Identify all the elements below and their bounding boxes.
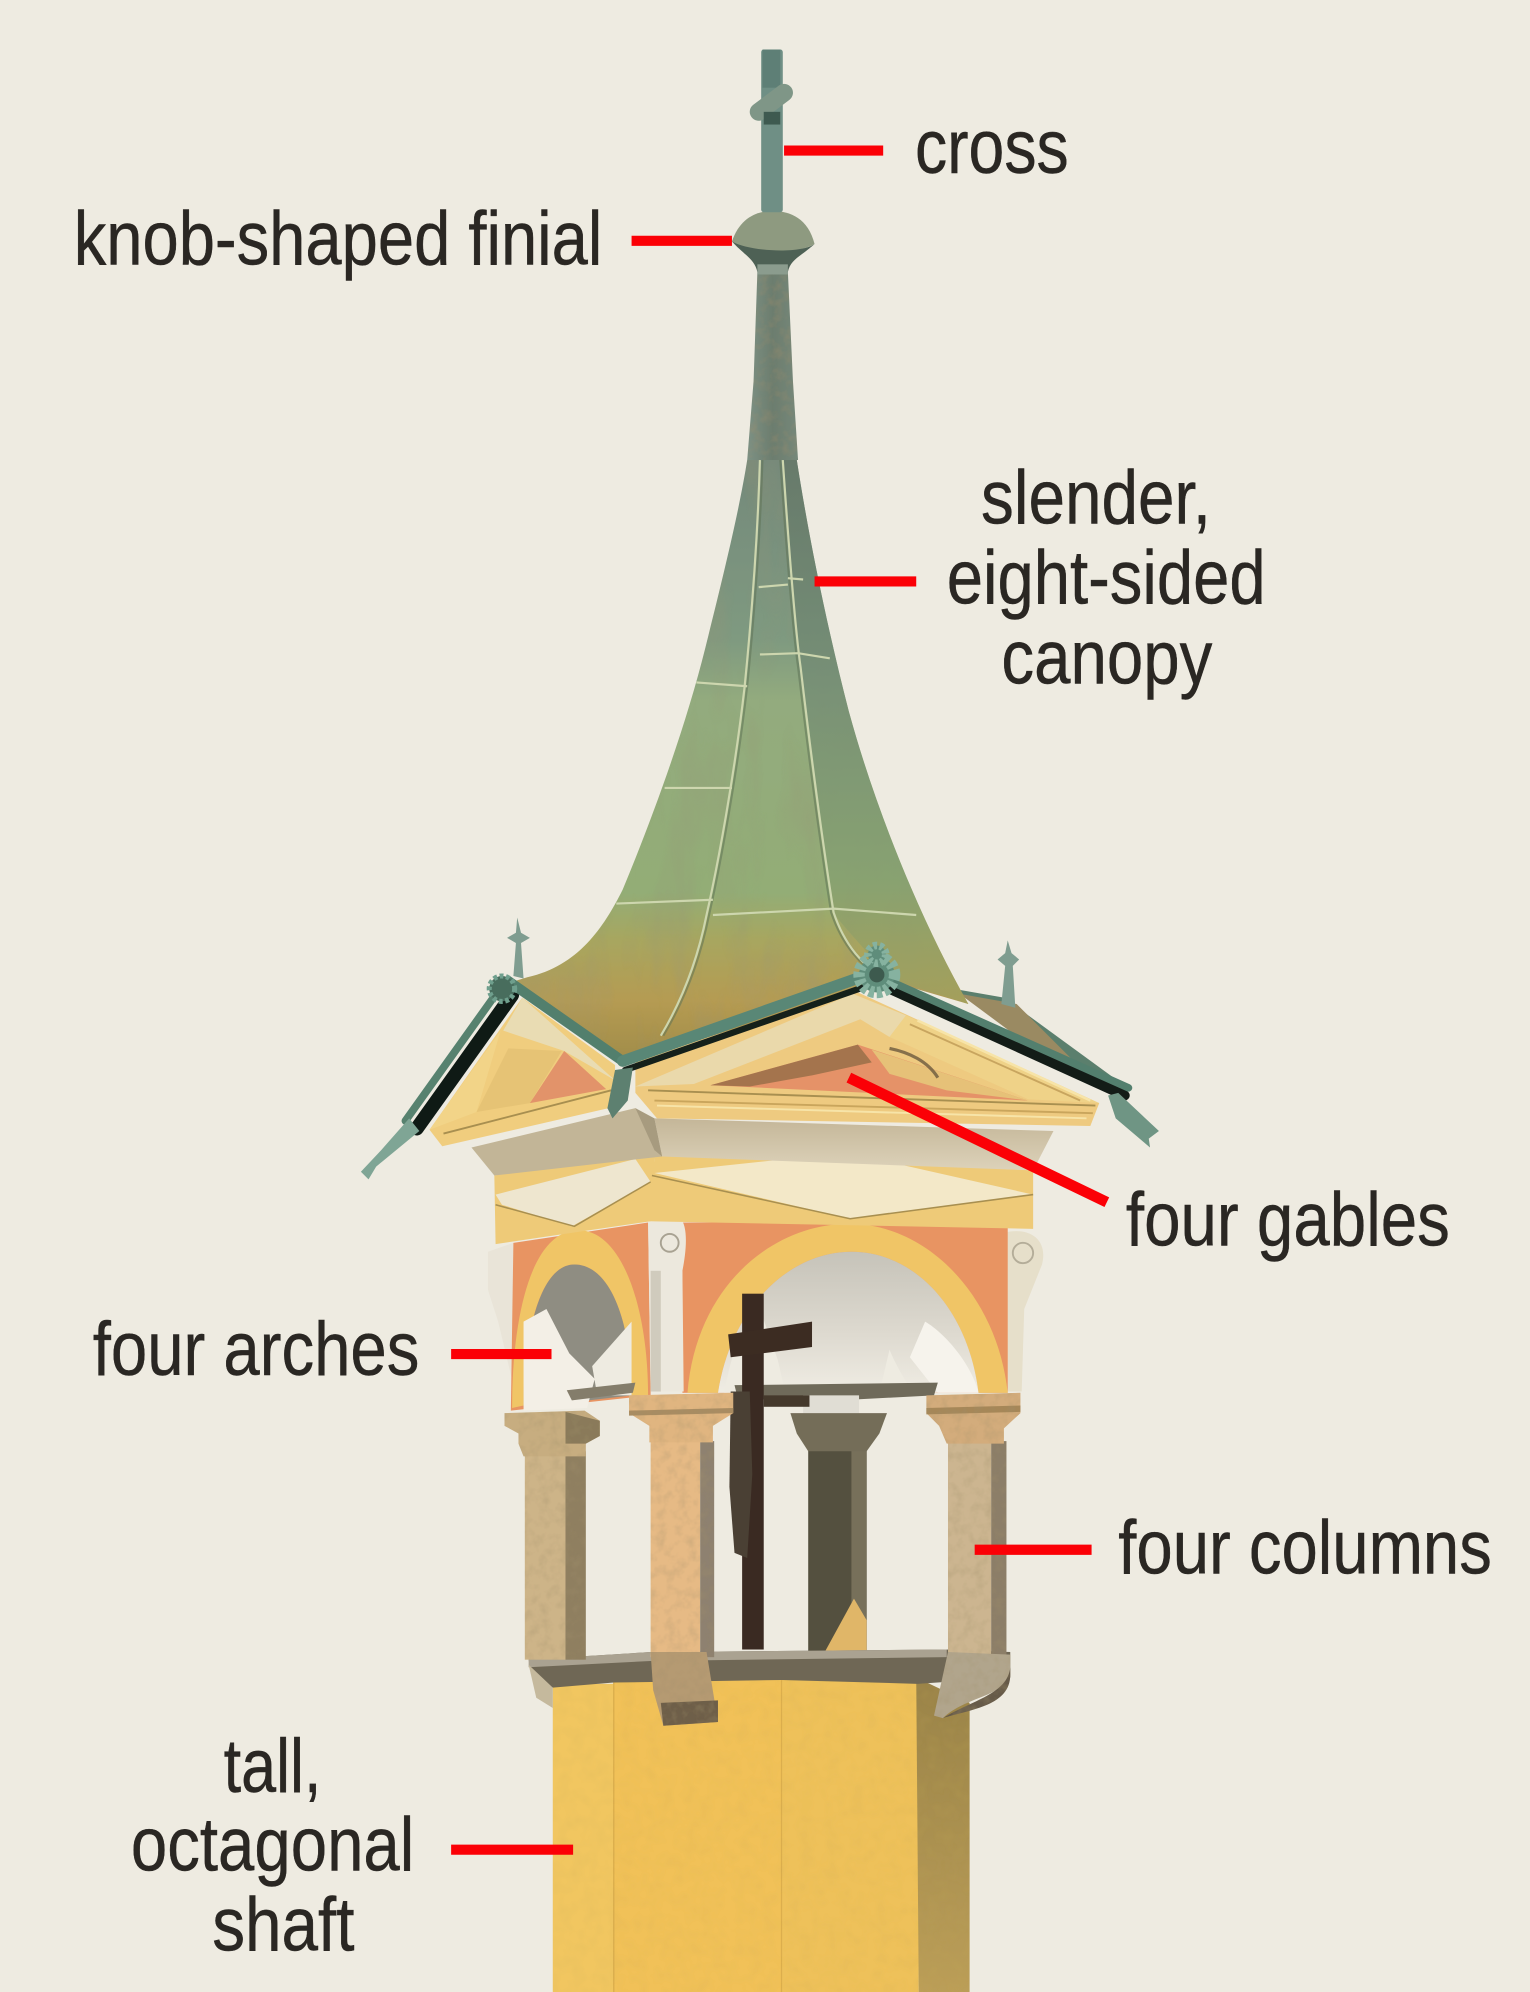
label: slender, eight-sided canopy: slender, [981, 456, 1211, 541]
four arches storey [488, 1217, 1043, 1413]
leader: knob-shaped finial [632, 237, 732, 245]
label: tall, octagonal shaft: tall, [224, 1724, 322, 1809]
frieze with diamonds [494, 1148, 1033, 1244]
roof edges [405, 976, 1128, 1128]
label: four arches: four arches [93, 1307, 419, 1392]
leader: shaft [451, 1846, 573, 1854]
seams [616, 460, 916, 1036]
rosettes and corner ornaments [361, 918, 1159, 1179]
label: cross: cross [915, 105, 1069, 190]
right column with bracket [926, 1393, 1020, 1718]
cornice below gables [471, 1108, 1053, 1176]
leader: gables [849, 1078, 1107, 1202]
label: knob-shaped finial: knob-shaped finial [74, 196, 602, 281]
right corbel [1004, 1231, 1043, 1392]
label: slender, eight-sided canopy [947, 456, 1266, 701]
octagonal shaft [553, 1677, 970, 1992]
tower illustration [361, 50, 1159, 1992]
right panel [783, 460, 968, 1004]
seam shadows [663, 460, 881, 1036]
label: tall, octagonal shaft: octagonal [131, 1803, 414, 1888]
leader: cross [784, 147, 883, 155]
left corbel [488, 1243, 513, 1385]
bell plate [735, 1383, 938, 1403]
lower bands [648, 1090, 1095, 1106]
front arch face [682, 1223, 1008, 1393]
canopy [515, 460, 968, 1065]
label: tall, octagonal shaft [131, 1724, 414, 1968]
left column [504, 1411, 600, 1660]
label: slender, eight-sided canopy: canopy [1001, 616, 1212, 701]
tympanum [710, 1045, 1028, 1101]
leader: arches [451, 1350, 552, 1358]
label: slender, eight-sided canopy: eight-sided [947, 536, 1266, 621]
front column with bracket [629, 1393, 733, 1726]
front gable [635, 990, 1099, 1126]
leader: columns [975, 1546, 1092, 1554]
crucifix [728, 1294, 812, 1650]
centre corbel [648, 1217, 686, 1392]
spire neck [747, 272, 798, 460]
left arch face [511, 1223, 651, 1411]
back column [790, 1413, 887, 1655]
cross [759, 50, 784, 212]
label: tall, octagonal shaft: shaft [212, 1883, 355, 1968]
left gable [430, 998, 615, 1146]
ledge above shaft [529, 1650, 1010, 1708]
label: four gables: four gables [1126, 1177, 1450, 1262]
leader: canopy [815, 577, 916, 585]
back right roof [953, 989, 1131, 1093]
raking moulding [890, 1015, 1099, 1103]
knob-shaped finial [732, 211, 815, 274]
soffit [635, 994, 906, 1087]
